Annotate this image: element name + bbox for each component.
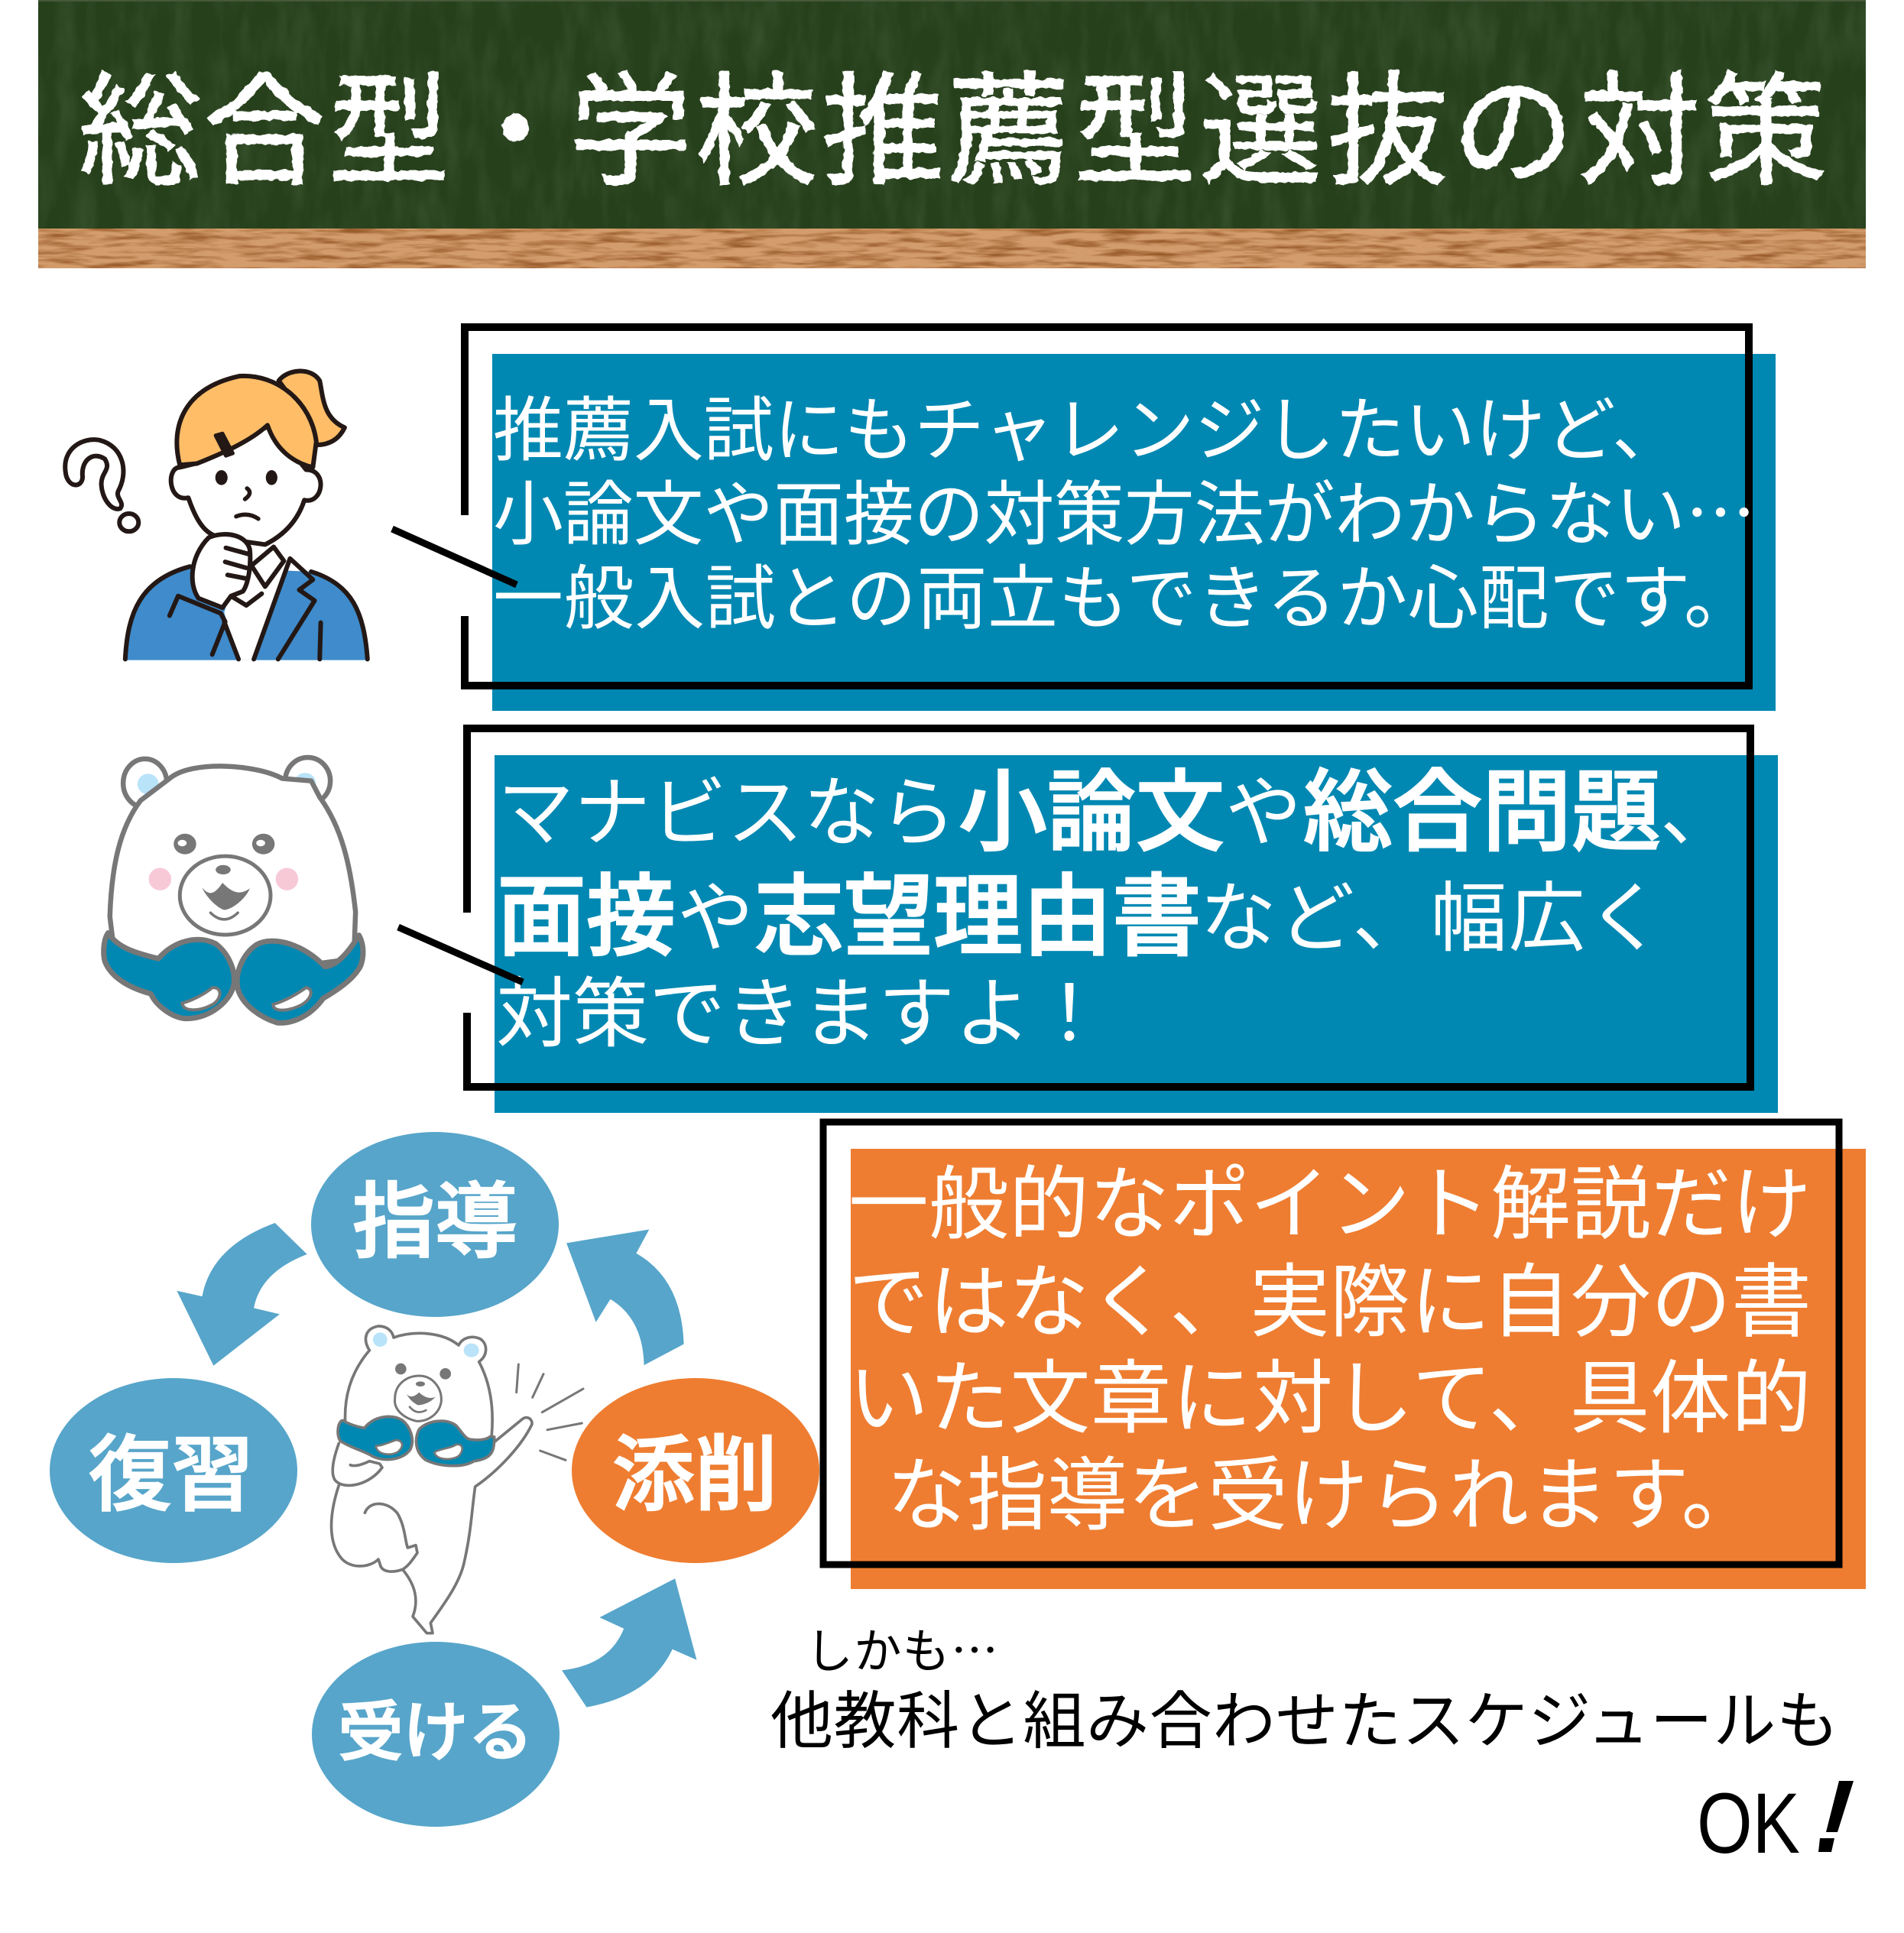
answer text: 小論文 <box>958 763 1224 862</box>
answer text <box>496 762 1737 1057</box>
panel: worry speech box <box>392 327 1776 711</box>
panel background <box>495 755 1778 1113</box>
title: 総合型 <box>79 63 452 200</box>
icon: thinking student <box>125 371 368 660</box>
cycle diagram <box>50 1132 819 1827</box>
node: review: 復習 <box>89 1429 254 1521</box>
panel background <box>851 1149 1866 1589</box>
worry text: 一般入試との両立もできるか心配です。 <box>493 560 1754 638</box>
answer text: や <box>1225 770 1302 856</box>
schedule text: 他教科と組み合わせたスケジュールも <box>770 1687 1839 1756</box>
worry text <box>493 392 1756 638</box>
node: guidance: 指導 <box>352 1176 517 1268</box>
feedback text: ではなく、実際に自分の書 <box>848 1258 1812 1348</box>
node: guidance <box>311 1132 559 1317</box>
panel: answer speech box <box>398 728 1778 1113</box>
worry text: 推薦入試にもチャレンジしたいけど、 <box>493 392 1682 470</box>
node: take: 受ける <box>338 1697 534 1769</box>
title: 学校推薦型選抜の対策 <box>569 63 1831 200</box>
offset frame <box>823 1122 1839 1565</box>
worry text: 小論文や面接の対策方法がわからない… <box>493 458 1756 559</box>
arrows <box>177 1223 696 1708</box>
answer text: 、 <box>1660 770 1737 856</box>
answer text: 志望理由書 <box>754 867 1202 967</box>
icon: motion lines <box>517 1364 583 1460</box>
answer text: や <box>677 876 754 962</box>
answer text: 総合問題 <box>1303 762 1661 862</box>
title: ・ <box>454 63 576 200</box>
feedback text: な指導を受けられます。 <box>887 1451 1762 1541</box>
panel: feedback explanation box <box>823 1122 1866 1589</box>
answer text: マナビスなら <box>498 770 956 856</box>
answer text: 面接 <box>497 867 676 967</box>
connector line <box>392 529 517 585</box>
panel background <box>492 354 1776 711</box>
connector line <box>398 927 523 982</box>
offset frame <box>467 728 1750 1087</box>
node: correction: 添削 <box>612 1429 777 1521</box>
title blackboard <box>38 0 1866 268</box>
feedback text: いた文章に対して、具体的 <box>848 1354 1812 1444</box>
answer text: など、幅広く <box>1200 876 1663 962</box>
OK emphasis: OK <box>1697 1776 1800 1871</box>
icon: dancing polar bear <box>332 1326 532 1633</box>
offset frame <box>465 327 1749 686</box>
answer text: 対策できますよ！ <box>496 971 1108 1057</box>
feedback text: 一般的なポイント解説だけ <box>848 1160 1812 1250</box>
node: correction <box>572 1378 819 1563</box>
node: review <box>50 1378 297 1563</box>
small lead text: しかも… <box>806 1613 998 1682</box>
icon: polar bear mascot <box>104 757 363 1023</box>
chalk tray <box>38 229 1866 268</box>
feedback text <box>848 1160 1812 1541</box>
node: take <box>312 1642 560 1827</box>
icon: question mark <box>65 439 138 531</box>
